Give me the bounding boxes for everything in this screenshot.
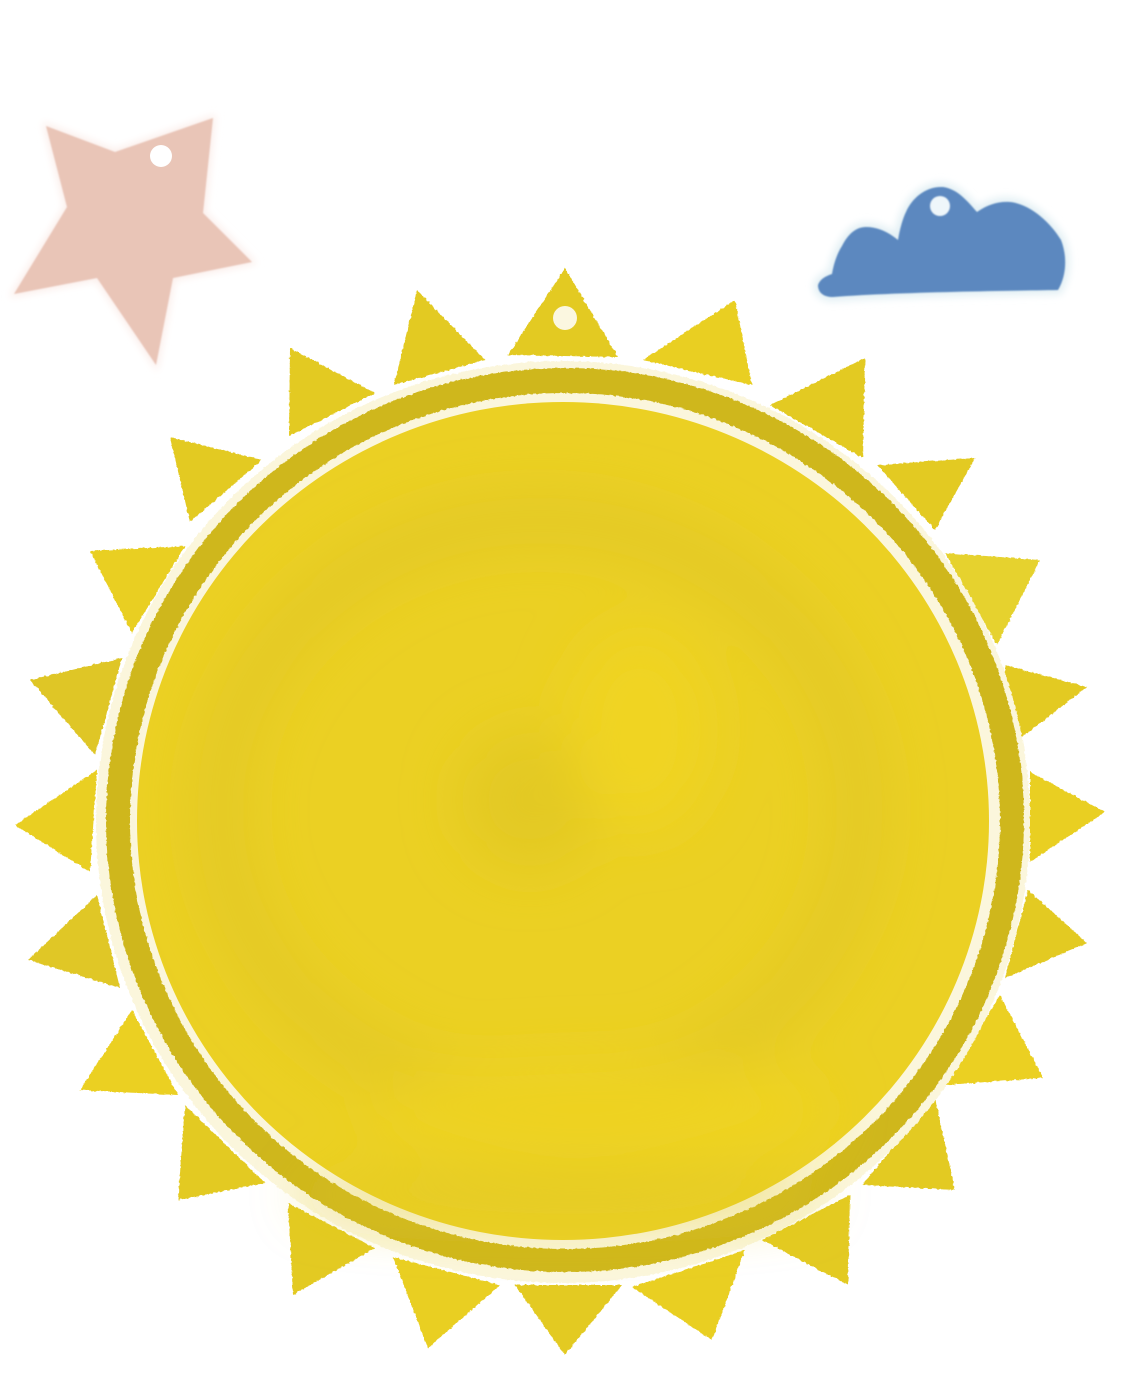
sun dark ring xyxy=(106,368,1024,1272)
star ornament xyxy=(14,118,252,365)
cloud ornament xyxy=(818,187,1065,297)
sun face xyxy=(137,402,989,1240)
sun inner white ring xyxy=(130,393,1000,1249)
sun face shading xyxy=(220,520,860,1217)
top ray hole xyxy=(553,306,577,330)
cloud hole xyxy=(930,196,950,216)
sun outer white edge xyxy=(96,361,1030,1283)
sun xyxy=(15,268,1105,1355)
sun rays xyxy=(15,268,1105,1355)
star hole xyxy=(150,145,172,167)
